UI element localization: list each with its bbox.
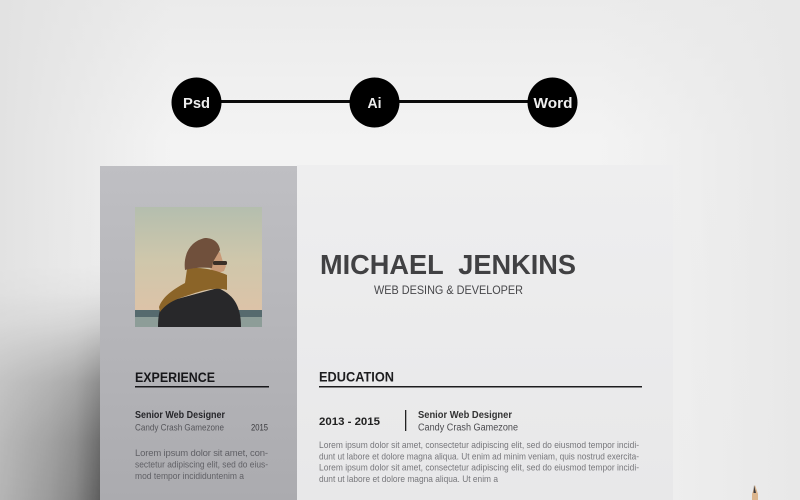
- education description: [319, 440, 639, 485]
- education company: Candy Crash Gamezone: [418, 422, 518, 434]
- icon: pencil tip: [752, 485, 758, 500]
- education description: dunt ut labore et dolore magna aliqua. Ut enim ad minim veniam, quis nostrud exercita-: [319, 452, 639, 462]
- experience section: [135, 370, 269, 482]
- education description: Lorem ipsum dolor sit amet, consectetur adipiscing elit, sed do eiusmod tempor incidi-: [319, 440, 639, 451]
- profile photo: [135, 207, 262, 327]
- badge: Ai: Ai: [368, 95, 382, 112]
- sidebar panel: [100, 166, 297, 500]
- job title: WEB DESING & DEVELOPER: [374, 283, 523, 297]
- experience heading: EXPERIENCE: [135, 370, 215, 385]
- main panel: [297, 165, 673, 500]
- education description: dunt ut labore et dolore magna aliqua. Ut enim a: [319, 474, 499, 485]
- badge: Ai: [350, 78, 400, 128]
- connector line: [215, 100, 535, 103]
- experience description: mod tempor incididuntenim a: [135, 471, 245, 482]
- education section: [319, 370, 642, 485]
- badge: Psd: [172, 78, 222, 128]
- badge: Word: Word: [534, 95, 572, 112]
- education description: Lorem ipsum dolor sit amet, consectetur adipiscing elit, sed do eiusmod tempor incidi-: [319, 462, 639, 474]
- name heading: MICHAEL JENKINS: [320, 249, 576, 280]
- experience description: sectetur adipiscing elit, sed do eius-: [135, 460, 268, 470]
- experience description: Lorem ipsum dolor sit amet, con-: [135, 448, 268, 459]
- education dates: 2013 - 2015: [319, 416, 380, 428]
- paper shadow: [0, 295, 100, 500]
- format connector: [172, 78, 578, 128]
- experience role: Senior Web Designer: [135, 410, 225, 421]
- experience company: Candy Crash Gamezone: [135, 422, 224, 434]
- experience year: 2015: [251, 422, 268, 434]
- experience description: [135, 448, 268, 482]
- badge: Psd: Psd: [183, 95, 210, 112]
- resume sheet: [100, 165, 673, 500]
- badge: Word: [528, 78, 578, 128]
- education role: Senior Web Designer: [418, 410, 512, 421]
- education heading: EDUCATION: [319, 370, 394, 384]
